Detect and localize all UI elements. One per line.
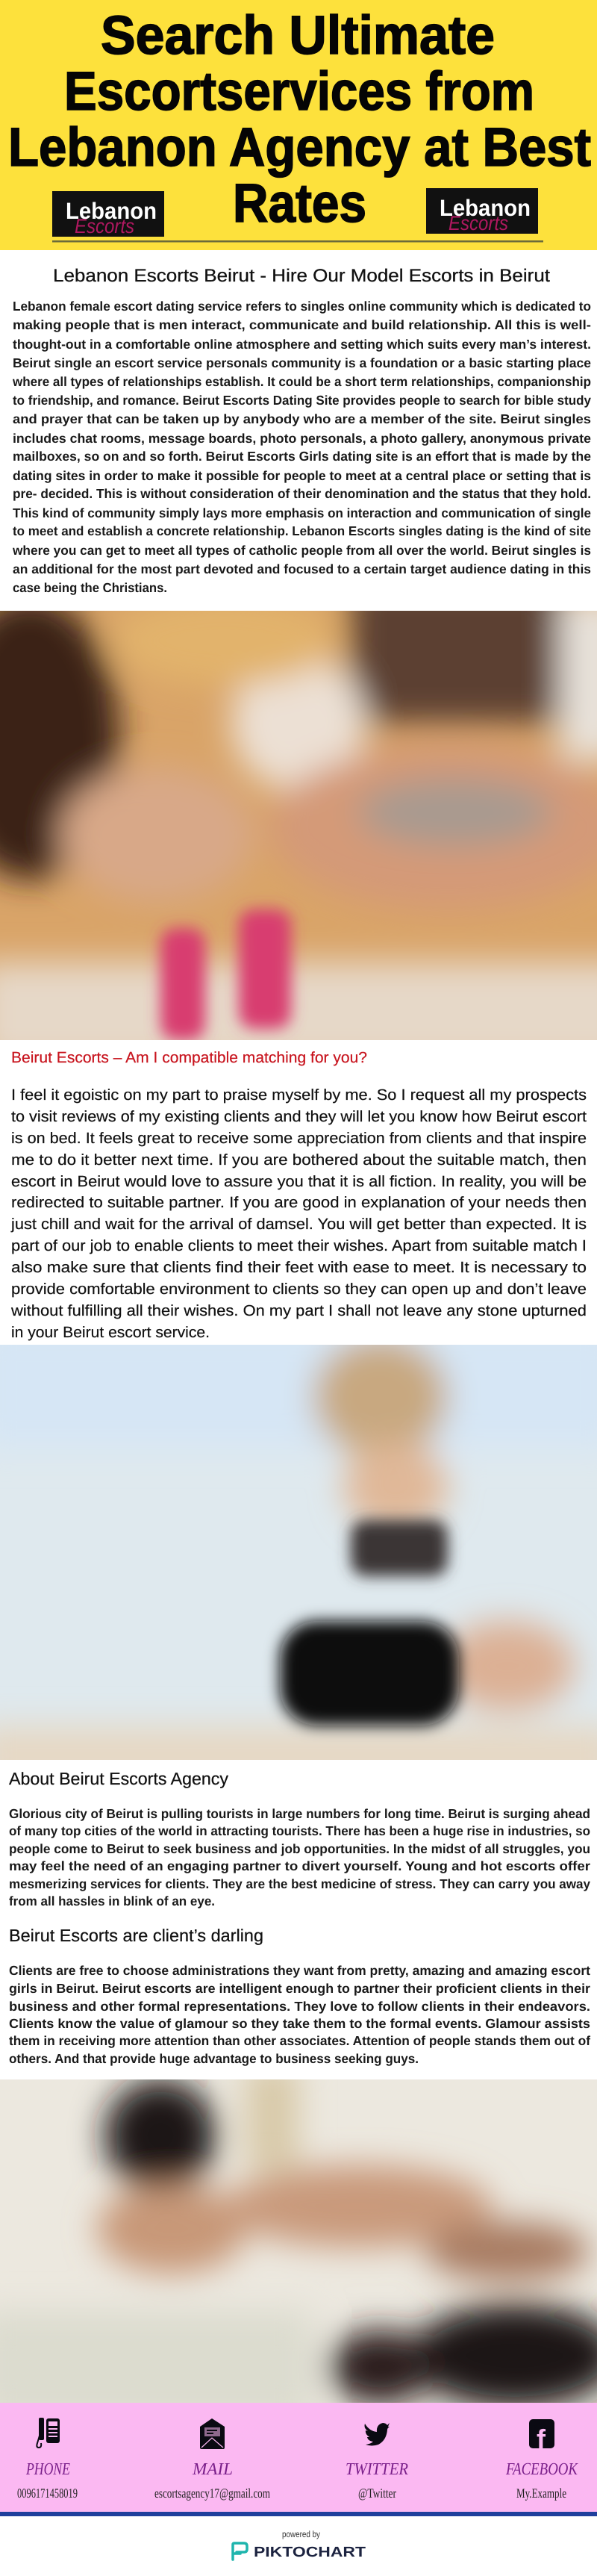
title: Search Ultimate [101, 5, 495, 66]
powered by piktochart: powered by [282, 2529, 320, 2539]
text block: compatibility: also make sure that clients find their feet with ease to meet. It is necessary to [11, 1259, 587, 1276]
text block: darling [9, 1963, 590, 2066]
text block: compatibility: part of our job to enable clients to meet their wishes. Apart from suitable match I [11, 1237, 587, 1254]
text block: intro: Beirut single an escort service personals community is a foundation or a basic starting place [13, 355, 591, 370]
text block: about: Glorious city of Beirut is pulling tourists in large numbers for long time. Beirut is surging ahead [9, 1806, 590, 1821]
text block: compatibility: without fulfilling all their wishes. On my part I shall not leave any stone upturned [10, 1302, 587, 1319]
icon: facebook [529, 2419, 554, 2454]
logo: right [426, 188, 538, 234]
icon: mail [200, 2418, 225, 2449]
icon: twitter [364, 2423, 390, 2446]
logo: left: Escorts [75, 215, 134, 237]
text block: compatibility [10, 1086, 587, 1341]
text block: intro: and prayer that can be taken up by anybody who are a member of the site. Beirut singles [13, 411, 591, 426]
text block: compatibility: in your Beirut escort service. [11, 1324, 210, 1341]
text block: intro: Lebanon female escort dating service refers to singles online community which is dedicated to [13, 299, 591, 314]
text block: intro: thought-out in a comfortable online atmosphere and setting which suits every man’s interest. [13, 337, 591, 352]
label: facebook: FACEBOOK [505, 2460, 578, 2478]
title [8, 5, 591, 234]
heading: compatibility: Beirut Escorts – Am I compatible matching for you? [11, 1049, 367, 1066]
icon: piktochart logo [233, 2543, 247, 2560]
logo: left [52, 191, 164, 237]
label: phone: PHONE [25, 2460, 70, 2478]
text block: compatibility: to visit reviews of my existing clients and they will let you know how Beirut escort [11, 1108, 587, 1125]
photo 3 (abstract colour placeholder) [0, 2079, 597, 2403]
label: facebook [505, 2460, 578, 2501]
label: twitter [346, 2460, 408, 2501]
text block: compatibility: escort in Beirut would love to assure you that it is all fiction. In reality, you will be [11, 1173, 587, 1190]
text block: intro [12, 299, 591, 595]
text block: about: may feel the need of an engaging partner to divert yourself. Young and hot escorts offer [9, 1858, 590, 1873]
text block: intro: dating sites in order to make it possible for people to meet at a central place or setting that is [13, 468, 591, 483]
text block: darling: them in receiving more attention than other associates. Attention of people stands them out of [9, 2033, 590, 2048]
text block: compatibility: me to do it better next time. If you are bothered about the suitable match, then [11, 1151, 587, 1169]
text block: compatibility: is on bed. It feels great to receive some appreciation from clients and that inspire [11, 1130, 587, 1147]
heading: intro: Lebanon Escorts Beirut - Hire Our Model Escorts in Beirut [53, 266, 550, 286]
logo: right: Escorts [448, 212, 508, 234]
panel: contact footer [0, 2403, 597, 2516]
text block: compatibility: just chill and wait for the arrival of damsel. You will get better than expected. It is [10, 1216, 587, 1233]
icon: facebook: f [537, 2424, 546, 2454]
label: phone [17, 2460, 78, 2501]
text block: about: of many top cities of the world in attracting tourists. There has been a huge rise in industries, so [9, 1823, 590, 1838]
header banner [0, 0, 597, 250]
text block: darling: others. And that provide huge advantage to business seeking guys. [9, 2051, 419, 2066]
title: Rates [233, 173, 366, 234]
text block: intro: case being the Christians. [13, 580, 167, 595]
label: mail: MAIL [192, 2460, 233, 2478]
powered by piktochart: PIKTOCHART [254, 2545, 366, 2560]
text block: intro: to friendship, and romance. Beirut Escorts Dating Site provides people to search for bible study [13, 393, 591, 408]
text block: compatibility: redirected to suitable partner. If you are good in explanation of your needs then [11, 1194, 587, 1211]
photo 2 (abstract colour placeholder) [0, 1345, 597, 1760]
text block: about: mesmerizing services for clients. They are the best medicine of stress. They can carry you away [9, 1876, 590, 1891]
text block: compatibility: provide comfortable environment to clients so they can open up and don’t leave [11, 1281, 587, 1298]
text block: darling: girls in Beirut. Beirut escorts are intelligent enough to partner their proficient clients in their [9, 1981, 590, 1996]
logo: left: Lebanon [66, 198, 157, 224]
text block: intro: where you can get to meet all types of catholic people from all over the world. Beirut singles is [12, 543, 591, 558]
text block: intro: This kind of community simply lays more emphasis on interaction and communication of single [13, 505, 591, 520]
text block: about: from all hassles in blink of an eye. [9, 1894, 215, 1908]
text block: intro: pre- decided. This is without consideration of their denomination and the status that they hold. [13, 486, 591, 501]
icon: phone [37, 2418, 60, 2448]
title: Escortservices from [64, 61, 534, 122]
text block: intro: includes chat rooms, message boards, photo personals, a photo gallery, anonymous private [13, 431, 591, 446]
label: twitter: TWITTER [346, 2460, 408, 2478]
powered by piktochart [233, 2529, 366, 2560]
heading: darling: Beirut Escorts are client’s darling [9, 1926, 263, 1945]
text block: intro: an additional for the most part devoted and focused to a certain target audience dating in this [13, 561, 591, 576]
photo 1 (abstract colour placeholder) [0, 611, 597, 1040]
label: mail: escortsagency17@gmail.com [154, 2486, 270, 2501]
text block: about: people come to Beirut to seek business and job opportunities. In the midst of all struggles, you [9, 1841, 590, 1856]
logo: right: Lebanon [440, 195, 531, 221]
text block: darling: business and other formal representations. They love to follow clients in their endeavors. [9, 1999, 590, 2014]
text block: intro: to meet and establish a concrete relationship. Lebanon Escorts singles dating is the kind of site [13, 523, 591, 538]
text block: about [9, 1806, 590, 1908]
label: phone: 0096171458019 [17, 2486, 78, 2501]
text block: darling: Clients are free to choose administrations they want from pretty, amazing and amazing escort [9, 1963, 590, 1978]
label: twitter: @Twitter [358, 2486, 396, 2501]
label: mail [154, 2460, 270, 2501]
heading: about: About Beirut Escorts Agency [9, 1769, 228, 1788]
text block: intro: where all types of relationships establish. It could be a short term relationships, companionship [12, 374, 591, 389]
text block: compatibility: I feel it egoistic on my part to praise myself by me. So I request all my prospects [11, 1086, 587, 1104]
label: facebook: My.Example [516, 2486, 566, 2501]
text block: intro: mailboxes, so on and so forth. Beirut Escorts Girls dating site is an effort that is made by the [13, 449, 591, 464]
text block: intro: making people that is men interact, communicate and build relationship. All this is well- [13, 317, 591, 332]
text block: darling: Clients know the value of glamour so they take them to the formal events. Glamour assists [9, 2016, 590, 2031]
